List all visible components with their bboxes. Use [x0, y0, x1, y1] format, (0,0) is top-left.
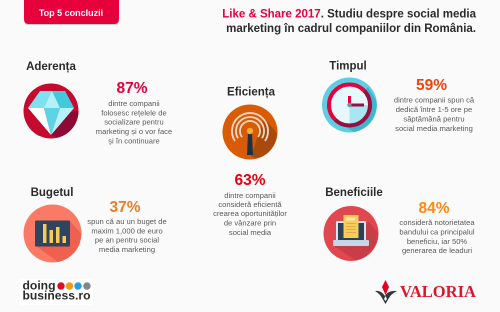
- panel: Timpul: [322, 60, 475, 133]
- text block: de vânzare prin: [224, 218, 276, 228]
- panel: Beneficiile: [324, 187, 475, 261]
- button: Top 5 concluzii: [24, 0, 119, 25]
- heading: Aderența: Aderența: [26, 61, 77, 73]
- text block: consideră eficientă: [218, 200, 282, 209]
- panel: Aderența: [24, 61, 172, 146]
- logo: doingbusiness.ro: [20, 278, 93, 305]
- panel: Bugetul: [24, 187, 167, 262]
- icon: antenna: [222, 104, 278, 160]
- icon: diamond: [24, 84, 78, 138]
- stat: 84%: 84%: [418, 200, 450, 217]
- title: marketing în cadrul companiilor din România.: [226, 23, 476, 35]
- text block: săptămână pentru: [403, 114, 465, 124]
- bars: [43, 224, 66, 243]
- text block: și în continuare: [108, 136, 160, 146]
- heading: Eficiența: Eficiența: [227, 86, 276, 98]
- logo: Valoria: [375, 280, 476, 304]
- logo: doingbusiness.ro: business.ro: [22, 288, 90, 302]
- text block: media marketing: [99, 245, 155, 254]
- text block: social media: [229, 228, 272, 237]
- text block: dedică între 1-5 ore pe: [396, 105, 472, 114]
- logo: doingbusiness.ro: doing: [22, 278, 56, 292]
- logo: Valoria: VALORIA: [400, 282, 476, 301]
- text block: folosesc rețelele de: [101, 108, 167, 118]
- title: Like & Share 2017. Studiu despre social media: [222, 8, 477, 20]
- text block: spun că au un buget de: [87, 217, 167, 226]
- heading: Bugetul: Bugetul: [31, 187, 73, 199]
- text block: bandului ca principalul: [399, 228, 475, 236]
- text block: consideră notorietatea: [399, 218, 475, 227]
- text block: dintre companii spun că: [394, 96, 475, 104]
- panel: Eficiența: [213, 86, 287, 237]
- stat: 63%: 63%: [234, 172, 266, 189]
- text block: generarea de leaduri: [402, 246, 472, 255]
- text block: socializare pentru: [104, 118, 164, 126]
- text block: maxim 1,000 de euro: [91, 226, 163, 236]
- heading: Beneficiile: Beneficiile: [325, 187, 383, 199]
- text block: beneficiu, iar 50%: [407, 237, 467, 246]
- title: [222, 8, 477, 35]
- stat: 59%: 59%: [416, 77, 447, 94]
- text block: dintre companii: [224, 191, 276, 200]
- icon: laptop: [324, 206, 378, 261]
- text block: dintre companii: [108, 99, 160, 108]
- text block: crearea oportunităților: [213, 209, 287, 218]
- text block: social media marketing: [395, 124, 473, 133]
- icon: clock: [322, 78, 377, 132]
- icon: bar chart: [24, 204, 82, 262]
- text block: pe an pentru social: [95, 236, 159, 244]
- stat: 37%: 37%: [109, 199, 141, 216]
- stat: 87%: 87%: [116, 80, 148, 97]
- heading: Timpul: Timpul: [329, 60, 367, 72]
- text block: marketing și o vor face: [96, 127, 172, 136]
- button: Top 5 concluzii: Top 5 concluzii: [39, 8, 103, 18]
